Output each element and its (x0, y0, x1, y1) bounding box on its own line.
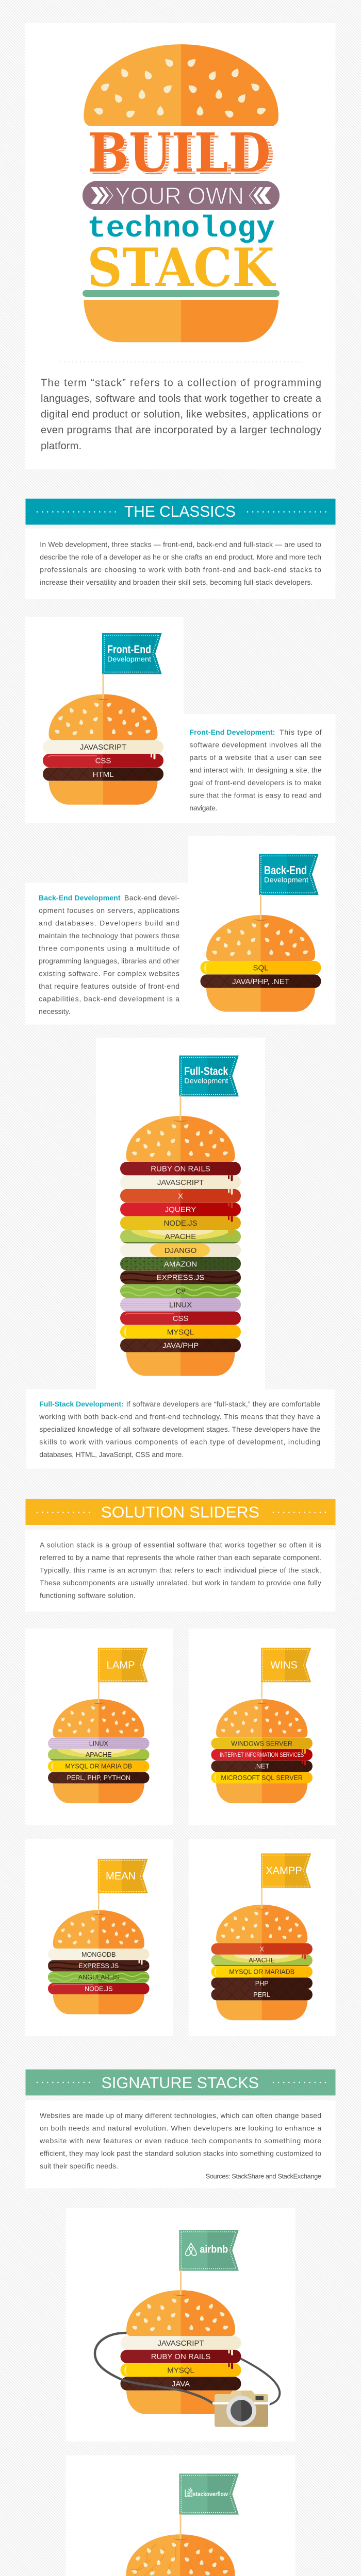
layer: JQUERY (120, 1202, 241, 1216)
layer: C#: C# (175, 1287, 186, 1296)
panel: front-end description: sure that the format is easy to read and (189, 791, 322, 800)
heading pill: YOUR OWN (83, 181, 280, 210)
panel: full-stack description: If software developers are “full-stack,” they are comfortable (126, 1400, 320, 1408)
panel: airbnb burger (65, 2208, 296, 2442)
layer: AMAZON: AMAZON (164, 1260, 197, 1268)
layer: CSS (120, 1311, 241, 1325)
layer: MONGODB (48, 1948, 150, 1960)
banner: THE CLASSICS: THE CLASSICS (124, 502, 236, 520)
layer: MONGODB: MONGODB (81, 1951, 116, 1958)
panel: full-stack description: skills to work with various components of each type of development, including (39, 1438, 320, 1446)
layer: EXPRESS.JS: EXPRESS.JS (78, 1962, 119, 1970)
layer: JAVASCRIPT (43, 740, 163, 754)
layer: PERL, PHP, PYTHON: PERL, PHP, PYTHON (67, 1774, 130, 1782)
layer: JAVA/PHP, .NET: JAVA/PHP, .NET (232, 977, 289, 986)
layer: NODE.JS (120, 1216, 241, 1230)
flag: stackoverflow (179, 2473, 239, 2515)
layer: JAVA/PHP (120, 1338, 241, 1352)
flag: XAMPP (261, 1853, 311, 1888)
layer: EXPRESS.JS: EXPRESS.JS (157, 1274, 204, 1282)
layer: JAVASCRIPT (121, 2336, 241, 2350)
banner: SIGNATURE STACKS: SIGNATURE STACKS (101, 2074, 259, 2092)
text block: intro (41, 377, 322, 452)
flag: WINS (261, 1648, 311, 1682)
layer: MICROSOFT SQL SERVER (211, 1772, 313, 1783)
panel: back-end description: and databases. Developers build and (39, 919, 179, 927)
layer: MYSQL: MYSQL (167, 2366, 194, 2375)
panel: WINS burger (189, 1629, 336, 1825)
flag: LAMP (98, 1648, 148, 1682)
layer: PERL (211, 1989, 313, 2001)
layer: JAVA/PHP: JAVA/PHP (162, 1342, 199, 1350)
flag: MEAN: MEAN (106, 1871, 136, 1882)
banner: SOLUTION SLIDERS: SOLUTION SLIDERS (101, 1503, 259, 1521)
layer: CSS: CSS (95, 756, 111, 765)
layer: RUBY ON RAILS: RUBY ON RAILS (151, 2352, 210, 2361)
layer: X: X (259, 1945, 264, 1953)
layer: MYSQL (121, 2363, 241, 2377)
layer: WINDOWS SERVER (211, 1738, 313, 1749)
heading pill: YOUR OWN: YOUR OWN (115, 182, 244, 209)
layer: APACHE (211, 1946, 313, 1966)
flag: LAMP: LAMP (107, 1660, 135, 1671)
panel: LAMP burger (25, 1629, 173, 1825)
panel: front-end description: Front-End Development: (189, 728, 275, 736)
panel: back-end description: existing software. For complex websites (39, 969, 179, 977)
layer: LINUX (120, 1298, 241, 1311)
panel: full-stack description: specialized knowledge of all software development stages. These developers have the (39, 1425, 320, 1433)
panel: solution sliders text: A solution stack is a group of essential software that works together so often it is (40, 1541, 321, 1549)
layer: X (211, 1943, 313, 1955)
layer: MICROSOFT SQL SERVER: MICROSOFT SQL SERVER (221, 1774, 303, 1782)
panel: XAMPP burger (189, 1839, 336, 2036)
flag: Front-End Development (102, 633, 162, 674)
flag: MEAN (98, 1859, 148, 1893)
layer: APACHE (120, 1219, 241, 1243)
icon: hero burger bottom bun (84, 300, 278, 342)
flag: stackoverflow: stackoverflow (193, 2490, 228, 2498)
panel: front-end description: parts of a website that a user can see (189, 753, 322, 761)
layer: CSS: CSS (173, 1314, 188, 1323)
layer: JAVASCRIPT (120, 1175, 241, 1189)
layer: INTERNET INFORMATION SERVICES (211, 1749, 313, 1760)
panel: full-stack description: working with both back-end and front-end technology. This means that they have a (39, 1413, 320, 1421)
flag: Front-End Development: Front-End (107, 643, 151, 656)
flag: airbnb: airbnb (200, 2244, 228, 2255)
layer: EXPRESS.JS (48, 1960, 150, 1972)
layer: DJANGO: DJANGO (165, 1246, 196, 1255)
panel: solution sliders text: These subcomponents are usually unrelated, but work in tandem to provide one fully (40, 1579, 321, 1587)
layer: JAVASCRIPT: JAVASCRIPT (157, 2339, 204, 2348)
panel: back-end description: Back-End Development (39, 893, 121, 902)
flag: Full-Stack Development (179, 1056, 239, 1096)
layer: X: X (178, 1192, 183, 1200)
layer: SQL: SQL (253, 963, 269, 973)
panel: signature stacks text: on both needs and natural evolution. When developers are looking to enhance a (40, 2124, 321, 2132)
layer: PERL, PHP, PYTHON (48, 1772, 150, 1783)
layer: NODE.JS (48, 1983, 150, 1994)
layer: LINUX: LINUX (169, 1300, 192, 1310)
burger: full-stack (120, 1056, 241, 1376)
flag: Back-End Development: Back-End (264, 863, 307, 876)
layer: HTML: HTML (93, 770, 113, 779)
panel: front-end burger (25, 617, 184, 823)
layer: JAVA: JAVA (172, 2380, 190, 2388)
panel: full-stack description (26, 1389, 335, 1469)
layer: MYSQL: MYSQL (167, 1328, 194, 1336)
panel: back-end description: programming languages, libraries and other (39, 957, 179, 965)
layer: NODE.JS: NODE.JS (163, 1219, 198, 1228)
flag: Front-End Development: Development (107, 655, 151, 663)
banner: SIGNATURE STACKS (26, 2070, 335, 2095)
icon: camera with strap (95, 2333, 280, 2427)
layer: MYSQL OR MARIA DB: MYSQL OR MARIA DB (65, 1763, 132, 1770)
panel: back-end description: maintain the technology that powers those (39, 931, 179, 940)
panel: signature stacks text: Websites are made up of many different technologies, which can often change based (40, 2111, 321, 2120)
layer: JAVASCRIPT: JAVASCRIPT (80, 743, 126, 752)
layer: MYSQL OR MARIADB (211, 1966, 313, 1977)
panel: back-end burger (188, 836, 335, 1025)
layer: MYSQL (120, 1325, 241, 1338)
text block: intro: The term “stack” refers to a collection of programming (41, 377, 321, 388)
layer: SQL (200, 961, 321, 974)
flag: WINS: WINS (270, 1660, 298, 1671)
panel: front-end description: and interact with. In designing a site, the (189, 766, 322, 774)
panel: front-end description: navigate. (189, 804, 217, 812)
layer: ANGULAR.JS: ANGULAR.JS (78, 1974, 119, 1981)
panel: classics intro text: increase their versatility and broaden their skill sets, becoming full-stack developers. (40, 578, 313, 586)
panel: full-stack description: Full-Stack Development: (39, 1400, 124, 1408)
panel: front-end description (184, 714, 335, 823)
text block: intro: platform. (41, 440, 81, 452)
panel: front-end description: This type of (280, 728, 322, 736)
panel: back-end description (25, 883, 188, 1025)
layer: MYSQL OR MARIADB: MYSQL OR MARIADB (229, 1969, 294, 1976)
panel: signature stacks text: Sources: StackShare and StackExchange (206, 2173, 321, 2180)
panel: stackoverflow burger (65, 2455, 296, 2576)
layer: APACHE: APACHE (86, 1751, 112, 1758)
layer: WINDOWS SERVER: WINDOWS SERVER (231, 1740, 292, 1747)
layer: LINUX (48, 1738, 150, 1749)
panel: hero title (25, 23, 335, 469)
flag: XAMPP: XAMPP (266, 1866, 302, 1877)
panel: back-end description: necessity. (39, 1007, 71, 1015)
layer: HTML (43, 767, 163, 781)
layer: CSS (43, 754, 163, 767)
burger: back-end stack (200, 854, 321, 1012)
panel: solution sliders text (25, 1530, 335, 1612)
circuit pattern on bun (132, 2543, 229, 2576)
text block: intro: languages, software and tools that work together to create a (41, 393, 322, 404)
banner: SOLUTION SLIDERS (26, 1499, 335, 1525)
panel: solution sliders text: functioning software solution. (40, 1591, 136, 1600)
layer: PHP (211, 1977, 313, 1989)
flag: Full-Stack Development: Full-Stack (184, 1065, 228, 1078)
layer: NODE.JS: NODE.JS (85, 1985, 113, 1992)
layer: ANGULAR.JS (48, 1972, 150, 1983)
panel: solution sliders text: Typically, this name is an acronym that refers to each individual piece of the stack. (40, 1566, 321, 1574)
panel: full-stack burger (96, 1038, 265, 1389)
layer: EXPRESS.JS (120, 1270, 241, 1284)
layer: .NET: .NET (254, 1763, 269, 1770)
panel: back-end description: three components using a multitude of (39, 944, 179, 952)
panel: classics intro text: professionals are choosing to work with both front-end and back-end stacks to (40, 566, 321, 574)
panel: classics intro text: In Web development, three stacks — front-end, back-end and full-stack — are used to (40, 540, 321, 549)
panel: back-end description: capabilities, back-end development is a (39, 994, 179, 1003)
panel: full-stack description: databases, HTML, JavaScript, CSS and more. (39, 1450, 184, 1459)
flag: airbnb (179, 2230, 239, 2271)
panel: back-end description: Back-end devel- (124, 893, 179, 902)
panel: solution sliders text: referred to by a name that represents the whole rather than each separate component. (40, 1553, 321, 1562)
layer: JAVA/PHP, .NET (200, 974, 321, 988)
panel: front-end description: goal of front-end developers is to make (189, 778, 322, 787)
burger: front-end stack (43, 633, 163, 805)
layer: APACHE: APACHE (165, 1232, 196, 1241)
flag: Back-End Development (259, 854, 319, 895)
layer: .NET (211, 1760, 313, 1772)
panel: front-end description: software development involves all the (189, 741, 322, 749)
layer: C# (120, 1284, 241, 1298)
text block: intro: even programs that are incorporated by a larger technology (41, 425, 321, 436)
layer: MYSQL OR MARIA DB (48, 1760, 150, 1772)
layer: APACHE: APACHE (249, 1957, 275, 1964)
panel: MEAN burger (25, 1839, 173, 2036)
layer: INTERNET INFORMATION SERVICES: INTERNET INFORMATION SERVICES (220, 1752, 304, 1758)
text block: intro: digital end product or solution, like websites, applications or (41, 409, 321, 420)
heading: technology: technology (87, 212, 275, 246)
layer: DJANGO (120, 1243, 241, 1257)
panel: signature stacks text: efficient, they may look past the standard solution stacks into something customized to (40, 2149, 321, 2158)
banner: THE CLASSICS (26, 499, 335, 524)
panel: classics intro text (25, 529, 335, 599)
layer: X (120, 1189, 241, 1202)
layer: AMAZON (120, 1257, 241, 1270)
panel: signature stacks text (25, 2100, 335, 2188)
layer: PHP: PHP (255, 1980, 269, 1987)
heading: BUILD: BUILD (90, 124, 275, 187)
layer: LINUX: LINUX (89, 1740, 108, 1747)
icon: hero burger top bun (84, 44, 278, 126)
layer: JQUERY: JQUERY (165, 1206, 196, 1214)
layer: RUBY ON RAILS: RUBY ON RAILS (151, 1164, 210, 1174)
layer: RUBY ON RAILS (120, 1162, 241, 1175)
panel: back-end description: that require features outside of front-end (39, 982, 179, 990)
layer: RUBY ON RAILS (121, 2350, 241, 2363)
heading: STACK: STACK (87, 237, 276, 299)
layer: APACHE (48, 1740, 150, 1760)
layer: JAVA (121, 2377, 241, 2391)
flag: Back-End Development: Development (264, 875, 308, 884)
panel: signature stacks text: website with new features or even reduce tech components to something more (39, 2137, 321, 2145)
panel: signature stacks text: suit their specific needs. (40, 2162, 118, 2170)
flag: Full-Stack Development: Development (184, 1077, 228, 1085)
layer: PERL: PERL (253, 1991, 270, 1998)
panel: classics intro text: describe the role of a developer as he or she crafts an end product. More and more tech (40, 553, 321, 561)
layer: JAVASCRIPT: JAVASCRIPT (157, 1178, 204, 1187)
panel: back-end description: opment focuses on servers, applications (39, 906, 179, 914)
green lettuce bar (83, 290, 280, 297)
heading: BUILD: BUILD (88, 121, 271, 184)
